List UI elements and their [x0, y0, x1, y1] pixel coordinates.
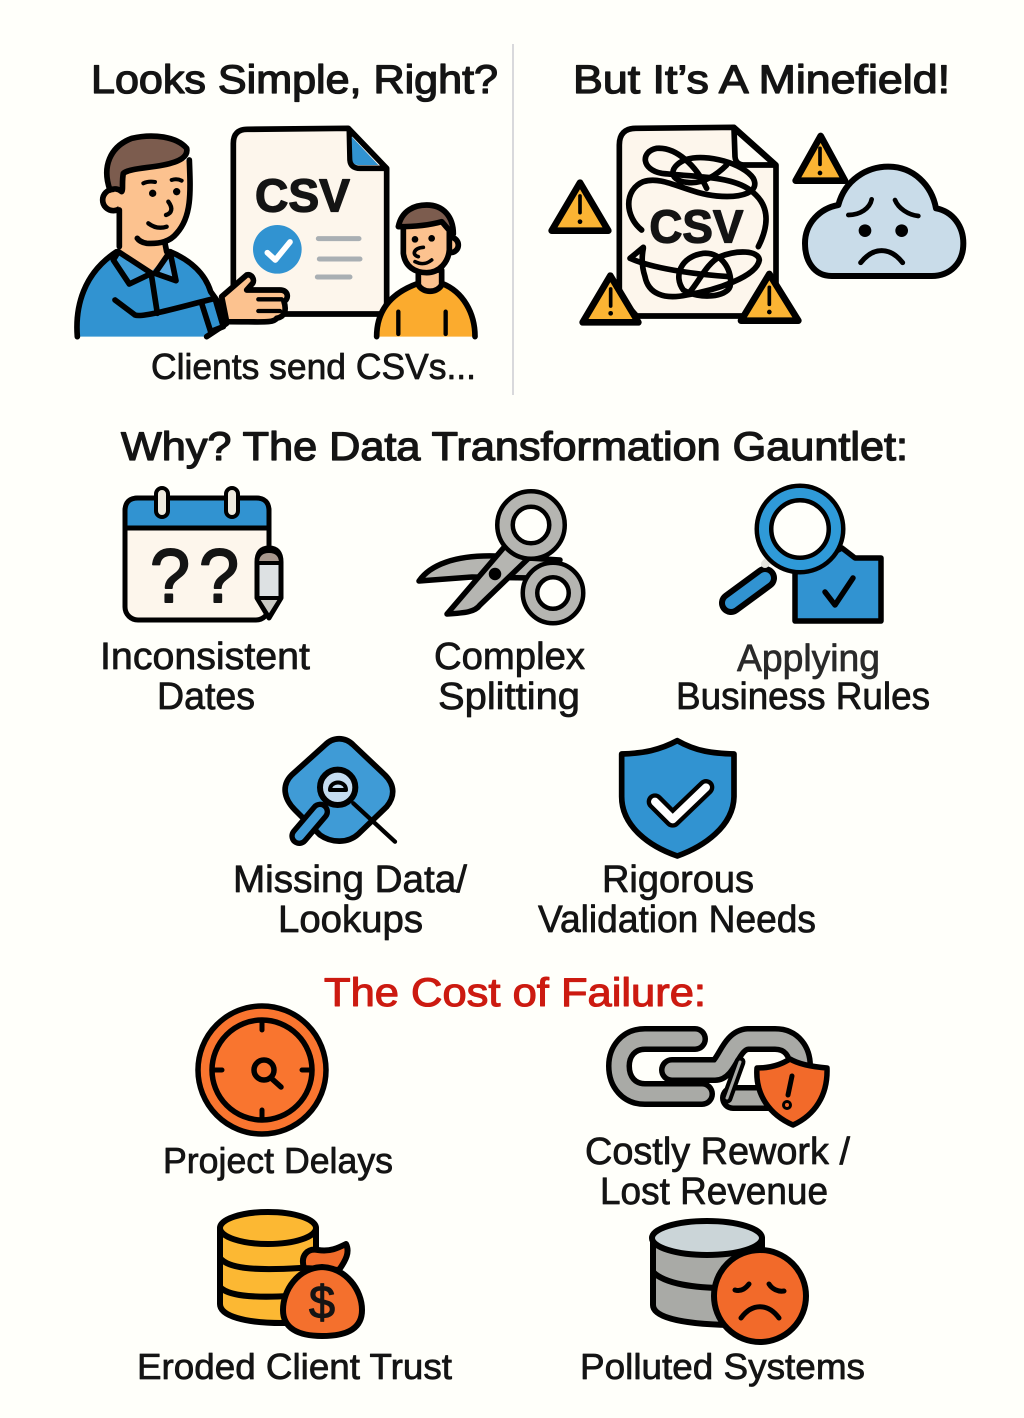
illustration: client hands over a CSV document	[77, 128, 475, 337]
icon: warning triangle bottom left	[583, 276, 638, 322]
item: Applying Business Rules	[676, 493, 930, 718]
label: Inconsistent	[100, 636, 310, 678]
icon: CSV document	[233, 128, 387, 314]
icon: diamond with magnifier	[285, 739, 395, 842]
icon: tangled CSV document: CSV	[649, 201, 743, 253]
label	[434, 636, 585, 718]
icon: calendar with question marks and pencil: ?	[150, 534, 190, 619]
label: Lost Revenue	[600, 1171, 828, 1213]
icon: small person in orange	[377, 205, 475, 337]
label: Missing Data/	[233, 859, 467, 901]
label: Dates	[157, 676, 255, 718]
label: Rigorous	[602, 859, 754, 901]
label: Eroded Client Trust	[137, 1346, 452, 1387]
label	[538, 859, 816, 941]
icon: gold database with money bag	[220, 1212, 362, 1336]
icon: calendar with question marks and pencil: ?	[199, 534, 239, 619]
item: Project Delays	[163, 1006, 393, 1181]
icon: scissors	[419, 499, 576, 616]
icon: CSV document: CSV	[255, 170, 350, 222]
label	[233, 859, 467, 941]
icon: grey database with sad face	[652, 1221, 806, 1342]
label	[676, 638, 930, 718]
icon: warning triangle bottom right	[741, 274, 798, 321]
label: Validation Needs	[538, 899, 816, 941]
icon: warning triangle left	[552, 183, 608, 231]
label	[100, 636, 310, 718]
icon: sad cloud	[805, 167, 963, 276]
label	[585, 1131, 850, 1213]
label: Project Delays	[163, 1140, 393, 1181]
item: Missing Data / Lookups	[233, 739, 467, 941]
illustration: tangled CSV minefield	[552, 127, 963, 322]
icon: broken chain with warning shield	[619, 1039, 827, 1125]
item: Costly Rework / Lost Revenue	[585, 1039, 850, 1213]
icon: tangled CSV document	[619, 127, 776, 316]
heading: But It's A Minefield!: But It’s A Minefield!	[573, 58, 950, 102]
label: Splitting	[438, 676, 580, 718]
label: Lookups	[278, 899, 423, 941]
icon: calendar with question marks and pencil	[125, 488, 281, 620]
item: Complex Splitting	[419, 499, 585, 718]
icon: shield with check	[622, 741, 734, 856]
heading: The Cost of Failure: The Cost of Failure:	[324, 971, 706, 1015]
item: Rigorous Validation Needs	[538, 741, 816, 941]
label: Applying	[737, 638, 880, 680]
label: Costly Rework /	[585, 1131, 850, 1173]
heading: The Data Transformation Gauntlet: Why? The Data Transformation Gauntlet:	[121, 425, 908, 469]
item: Eroded Client Trust	[137, 1212, 452, 1387]
icon: magnifier over checked document	[731, 493, 881, 621]
caption: Clients send CSVs: Clients send CSVs...	[151, 346, 476, 387]
item: Inconsistent Dates	[100, 488, 310, 718]
label: Business Rules	[676, 676, 930, 718]
icon: warning triangle top right	[796, 136, 845, 181]
heading: Looks Simple, Right?: Looks Simple, Right?	[91, 58, 498, 102]
icon: orange clock with magnifier	[198, 1006, 326, 1134]
label: Polluted Systems	[580, 1346, 865, 1387]
item: Polluted Systems	[580, 1221, 865, 1387]
label: Complex	[434, 636, 585, 678]
icon: man in blue shirt pointing	[77, 136, 287, 337]
icon: gold database with money bag: $	[309, 1276, 335, 1328]
